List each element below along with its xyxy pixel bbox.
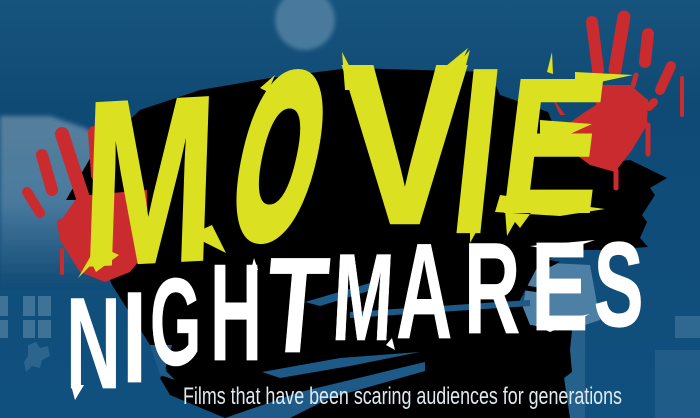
light patch behind E xyxy=(520,262,600,335)
red arm smear xyxy=(551,95,565,115)
window: left building xyxy=(0,296,51,372)
title line: MOVIE xyxy=(78,19,633,316)
title line: NIGHTMARES: E xyxy=(531,216,588,357)
black brush blob xyxy=(66,68,667,418)
moon xyxy=(275,0,335,50)
title line: NIGHTMARES: I xyxy=(122,265,147,410)
blue brush streaks xyxy=(150,283,530,418)
title line: MOVIE: V xyxy=(343,19,466,270)
title line: NIGHTMARES: S xyxy=(594,219,643,352)
title line: NIGHTMARES: T xyxy=(259,230,334,382)
red hand: right xyxy=(562,17,682,188)
title line: MOVIE: M xyxy=(78,46,221,316)
title line: NIGHTMARES: N xyxy=(66,271,121,416)
title line: MOVIE: E xyxy=(490,38,616,253)
title line: NIGHTMARES: H xyxy=(210,236,262,390)
brush spikes on MOVIE xyxy=(78,48,633,278)
title line: NIGHTMARES xyxy=(66,215,643,416)
brush spikes on NIGHTMARES xyxy=(71,240,595,400)
title line: NIGHTMARES: G xyxy=(150,254,201,392)
title line: MOVIE: O xyxy=(213,30,345,285)
red hand: left xyxy=(27,132,148,282)
title line: NIGHTMARES: M xyxy=(330,228,397,367)
black strokes over light patch xyxy=(508,256,560,296)
light glow on left xyxy=(0,116,125,285)
blue patch behind right hand xyxy=(551,84,600,116)
title line: MOVIE: I xyxy=(442,20,512,283)
building: right xyxy=(565,316,700,418)
black streak in blue patch xyxy=(555,95,576,102)
title line: NIGHTMARES: A xyxy=(396,217,452,367)
title line: NIGHTMARES: R xyxy=(464,215,520,361)
